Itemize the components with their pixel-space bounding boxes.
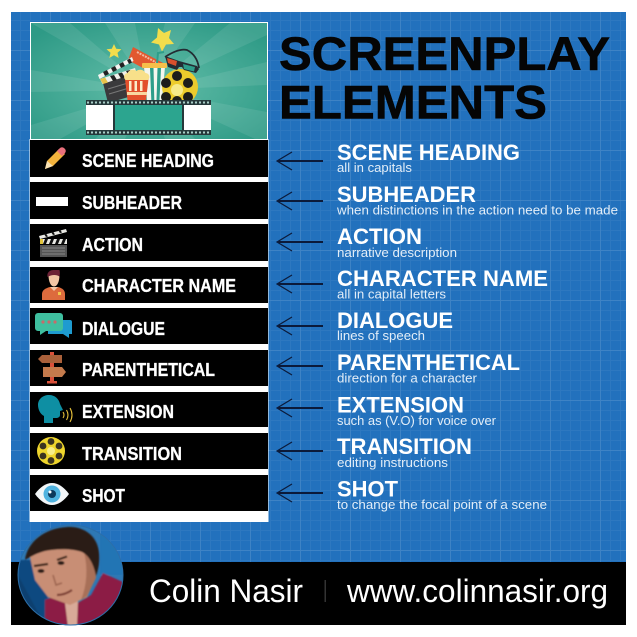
row labels (82, 150, 236, 506)
definition: action: ACTION (337, 224, 422, 249)
popcorn box (124, 70, 149, 100)
icon: eye (35, 483, 69, 505)
icon: film reel (37, 437, 65, 465)
definition: parenthetical: direction for a character (337, 372, 477, 386)
footer band (11, 562, 626, 625)
icon: character (42, 270, 65, 300)
icon: subheader bar (36, 197, 68, 206)
title: ELEMENTS (279, 76, 547, 128)
row labels: SHOT (82, 485, 126, 506)
definitions text (336, 140, 618, 512)
3d glasses (165, 50, 199, 73)
icon: dialogue bubbles (35, 313, 72, 338)
footer name: Colin Nasir (149, 573, 303, 609)
row labels: TRANSITION (82, 443, 182, 464)
definition: subheader: when distinctions in the action need to be made (336, 204, 618, 218)
icon: pencil (45, 147, 66, 169)
star large (151, 28, 174, 52)
definition: character name (337, 266, 548, 302)
row labels: SCENE HEADING (82, 150, 214, 171)
definition: character name: CHARACTER NAME (337, 266, 548, 291)
definition: scene heading: SCENE HEADING (337, 140, 520, 165)
film strip (86, 100, 211, 135)
arrows (277, 152, 323, 502)
definition: character name: all in capital letters (337, 288, 446, 302)
icon: clapperboard (39, 229, 67, 257)
row labels: DIALOGUE (82, 318, 165, 339)
panel: cinema banner (30, 22, 268, 140)
definition: transition: editing instructions (337, 456, 448, 470)
definition: scene heading: all in capitals (337, 161, 412, 175)
row labels: ACTION (82, 234, 143, 255)
definition: transition: TRANSITION (337, 434, 472, 459)
definition: shot: to change the focal point of a scene (337, 498, 547, 512)
portrait (18, 525, 125, 630)
definition: shot (337, 476, 547, 512)
soda cup (142, 52, 167, 100)
row labels: EXTENSION (82, 401, 174, 422)
panel: element list (30, 139, 268, 522)
definition: extension: such as (V.O) for voice over (337, 414, 496, 428)
clapperboard (98, 57, 136, 103)
definition: subheader: SUBHEADER (337, 182, 476, 207)
definition: action (337, 224, 457, 260)
definition: extension (337, 392, 496, 428)
definition: shot: SHOT (337, 476, 398, 502)
banner rays (31, 23, 267, 139)
row labels: SUBHEADER (82, 192, 182, 213)
definition: parenthetical (337, 350, 520, 386)
definition: action: narrative description (337, 246, 457, 260)
ticket (128, 47, 165, 75)
star small (106, 44, 122, 58)
definition: parenthetical: PARENTHETICAL (337, 350, 520, 375)
definition: transition (337, 434, 472, 470)
title: SCREENPLAY (279, 27, 610, 80)
row labels: CHARACTER NAME (82, 275, 236, 296)
footer url: www.colinnasir.org (346, 573, 608, 609)
definition: subheader (336, 182, 618, 218)
film reel (161, 69, 198, 106)
footer divider (324, 580, 326, 602)
definition: dialogue: lines of speech (337, 329, 425, 343)
row labels: PARENTHETICAL (82, 359, 215, 380)
icon: speaking head (38, 395, 72, 423)
definition: extension: EXTENSION (337, 392, 464, 418)
definition: dialogue: DIALOGUE (337, 308, 453, 333)
icon: signpost (38, 352, 66, 384)
title (279, 27, 610, 128)
